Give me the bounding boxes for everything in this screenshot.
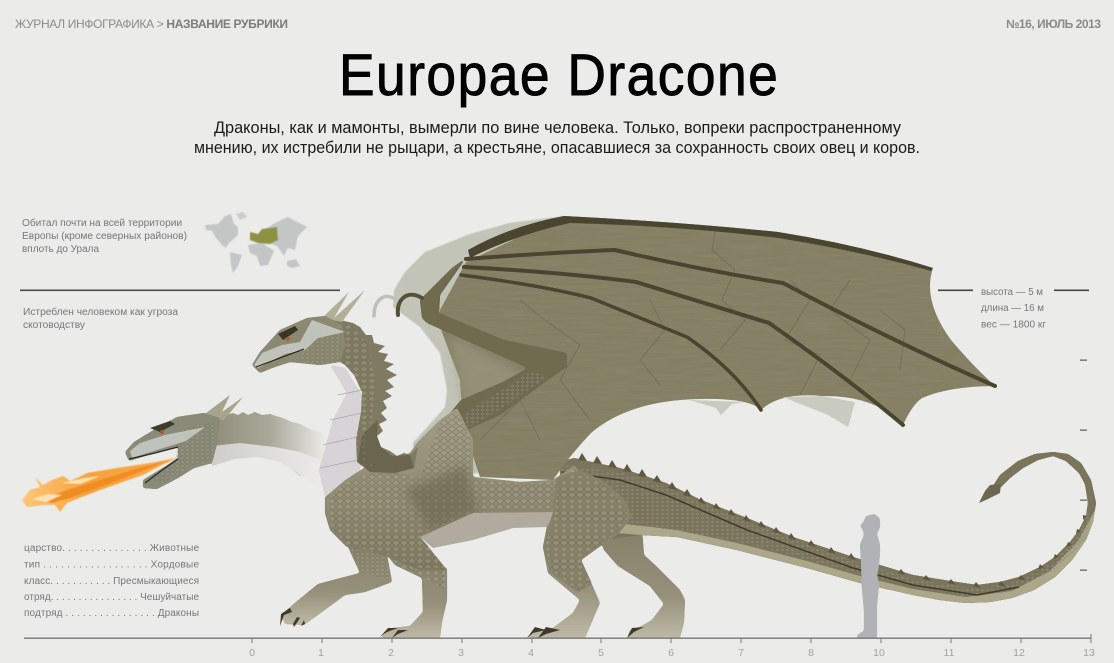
taxonomy table <box>24 543 199 619</box>
hip and thigh scales <box>543 470 632 592</box>
tail tip <box>979 484 1001 503</box>
subtitle <box>194 119 920 157</box>
neck back with spines <box>323 318 418 473</box>
dragon torso <box>325 408 632 570</box>
human silhouette <box>857 514 880 638</box>
length scale axis: 11 <box>944 647 955 659</box>
habitat text: Европы (кроме северных районов) <box>22 231 187 242</box>
extinction text: скотоводству <box>23 320 85 331</box>
length scale axis: 0 <box>249 647 255 659</box>
height scale ticks <box>1080 360 1087 571</box>
head <box>252 316 345 373</box>
extinction text <box>23 306 178 331</box>
length scale axis: 7 <box>738 647 744 659</box>
length scale axis: 1 <box>318 647 324 659</box>
taxonomy table: царство. . . . . . . . . . . . . . . Животные <box>24 543 199 554</box>
flame <box>22 458 177 512</box>
length scale axis: 3 <box>458 647 464 659</box>
length scale axis: 13 <box>1083 647 1095 659</box>
neck plates <box>319 365 365 497</box>
near front leg <box>380 550 447 638</box>
wing claws <box>374 295 422 316</box>
habitat text <box>22 217 187 255</box>
lowered head and neck <box>125 395 326 492</box>
length scale axis: 12 <box>1013 647 1025 659</box>
standing neck and head <box>252 290 418 497</box>
wing finger bones <box>461 216 995 425</box>
subtitle: Драконы, как и мамонты, вымерли по вине человека. Только, вопреки распространенному <box>214 119 902 137</box>
far rear leg <box>596 530 685 638</box>
near rear leg <box>527 510 644 638</box>
extinction text: Истреблен человеком как угроза <box>23 306 178 318</box>
stats: size: вес — 1800 кг <box>981 320 1046 330</box>
title: Europae Dracone <box>339 43 778 107</box>
length scale axis: 4 <box>528 647 534 659</box>
belly plates <box>420 512 555 548</box>
taxonomy table: тип . . . . . . . . . . . . . . . . . . Хордовые <box>24 560 199 570</box>
far front leg <box>280 540 392 627</box>
wing membrane <box>374 216 995 480</box>
veins <box>480 232 905 440</box>
taxonomy table: класс. . . . . . . . . . . Пресмыкающиеся <box>24 576 199 587</box>
length scale axis: 6 <box>668 647 674 659</box>
wing pale back membrane <box>393 216 564 480</box>
horns <box>322 290 365 322</box>
tail <box>560 452 1096 603</box>
pale wing scraps <box>689 400 745 415</box>
stats: size: длина — 16 м <box>981 303 1044 314</box>
wing arm <box>420 258 567 432</box>
length scale axis: 2 <box>388 647 394 659</box>
length scale axis <box>24 634 1095 659</box>
issue number: №16, ИЮЛЬ 2013 <box>1006 17 1101 31</box>
length scale axis: 5 <box>598 647 604 659</box>
icon: world map with Europe highlighted <box>205 212 307 273</box>
light membrane near elbow <box>450 335 525 410</box>
divider: extinction note <box>20 290 340 291</box>
subtitle: мнению, их истребили не рыцари, а крестьяне, опасавшиеся за сохранность своих овец и коров. <box>194 139 920 157</box>
stats: size <box>938 287 1089 330</box>
length scale axis: 8 <box>808 647 814 659</box>
taxonomy table: отряд. . . . . . . . . . . . . . . . Чешуйчатые <box>24 592 199 603</box>
habitat text: вплоть до Урала <box>22 244 99 255</box>
taxonomy table: подтряд . . . . . . . . . . . . . . . . Драконы <box>24 608 199 619</box>
habitat text: Обитал почти на всей территории <box>22 217 182 229</box>
stats: size: высота — 5 м <box>981 287 1043 298</box>
breadcrumb header: ЖУРНАЛ ИНФОГРАФИКА > НАЗВАНИЕ РУБРИКИ <box>15 17 288 31</box>
length scale axis: 10 <box>873 647 885 659</box>
